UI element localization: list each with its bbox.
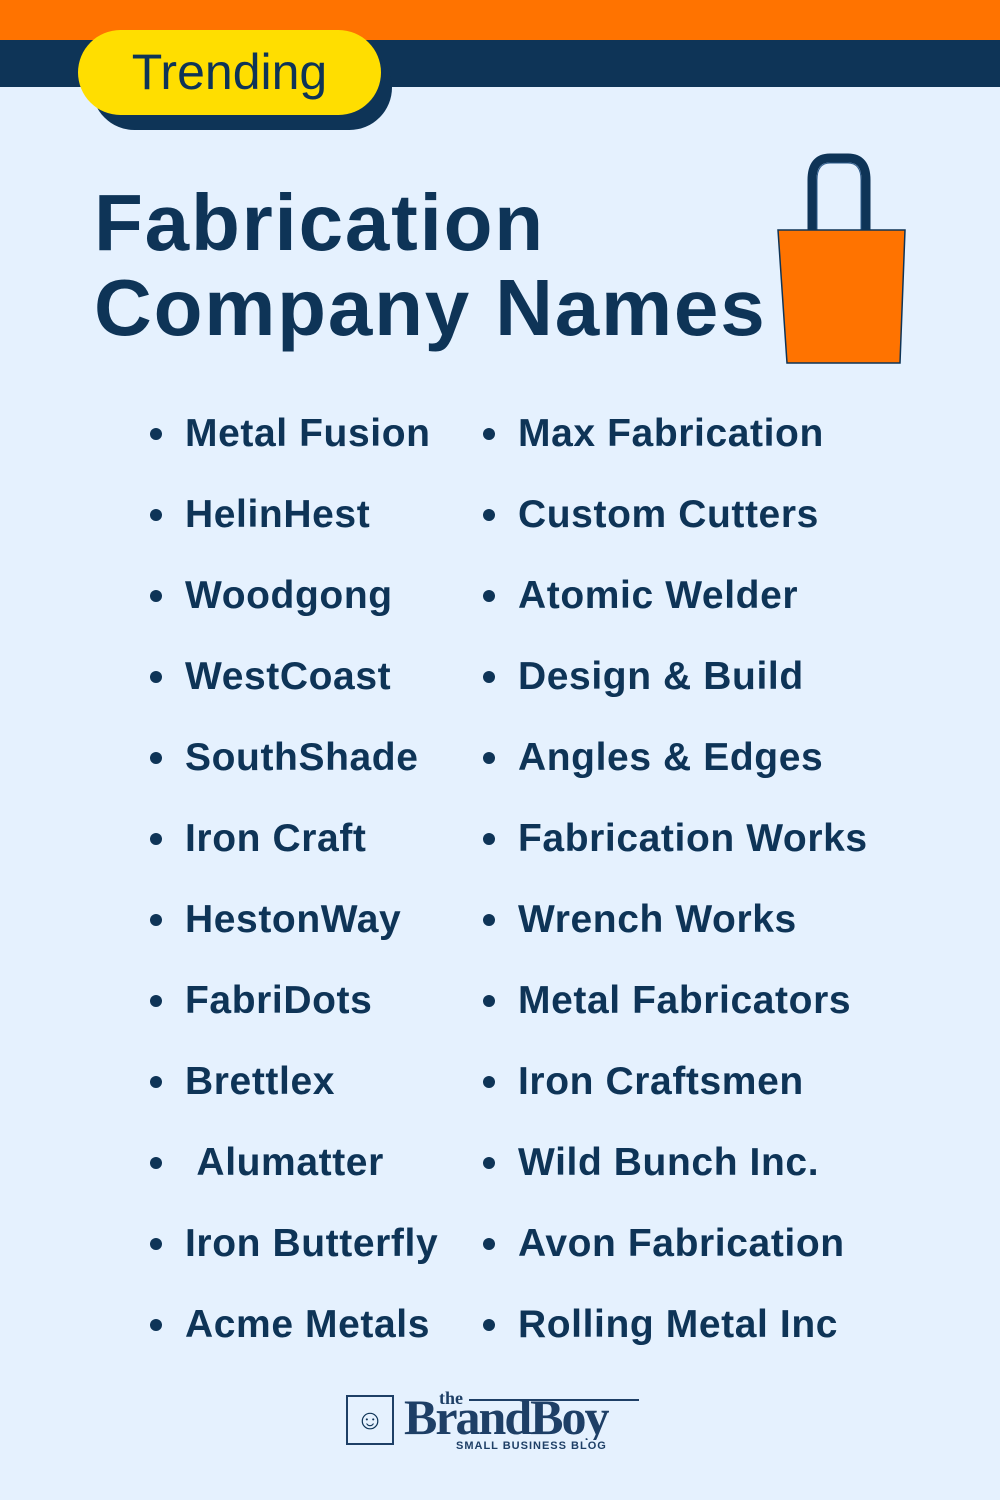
title [94, 178, 767, 352]
list: left column: SouthShade [185, 736, 419, 779]
navy band [0, 40, 1000, 87]
list: right column: Atomic Welder [518, 574, 798, 617]
list: right column [483, 412, 868, 1346]
trending badge [78, 30, 392, 130]
icon: tote bag [777, 154, 906, 364]
list: left column: Woodgong [185, 574, 393, 617]
list: left column: Iron Butterfly [185, 1222, 438, 1265]
list: right column: Iron Craftsmen [518, 1060, 804, 1103]
list: left column: HelinHest [185, 493, 370, 536]
list: right column: Fabrication Works [518, 817, 868, 860]
list: right column: Custom Cutters [518, 493, 819, 536]
list: right column: Metal Fabricators [518, 979, 851, 1022]
list: left column [150, 412, 438, 1346]
list: left column: Brettlex [185, 1060, 335, 1103]
list: right column: Rolling Metal Inc [518, 1303, 838, 1346]
list: left column: Alumatter [196, 1141, 384, 1184]
list: right column: Wild Bunch Inc. [518, 1141, 819, 1184]
logo: the BrandBoy: the [439, 1388, 463, 1408]
list: right column: Angles & Edges [518, 736, 823, 779]
logo: the BrandBoy [346, 1388, 639, 1452]
list: left column: Acme Metals [185, 1303, 430, 1346]
list: left column: Metal Fusion [185, 412, 431, 455]
list: left column: WestCoast [185, 655, 391, 698]
title: Fabrication [94, 178, 545, 267]
list: right column: Design & Build [518, 655, 804, 698]
list: left column: HestonWay [185, 898, 401, 941]
list: right column: Max Fabrication [518, 412, 824, 455]
list: left column: FabriDots [185, 979, 372, 1022]
list: right column: Avon Fabrication [518, 1222, 845, 1265]
title: Company Names [94, 263, 767, 352]
trending badge: Trending [132, 44, 327, 100]
logo: the BrandBoy: BrandBoy [404, 1389, 608, 1445]
logo: the BrandBoy: SMALL BUSINESS BLOG [456, 1440, 607, 1452]
list: left column: Iron Craft [185, 817, 366, 860]
logo: the BrandBoy: ☺ [356, 1404, 384, 1435]
list: right column: Wrench Works [518, 898, 797, 941]
top orange band [0, 0, 1000, 40]
